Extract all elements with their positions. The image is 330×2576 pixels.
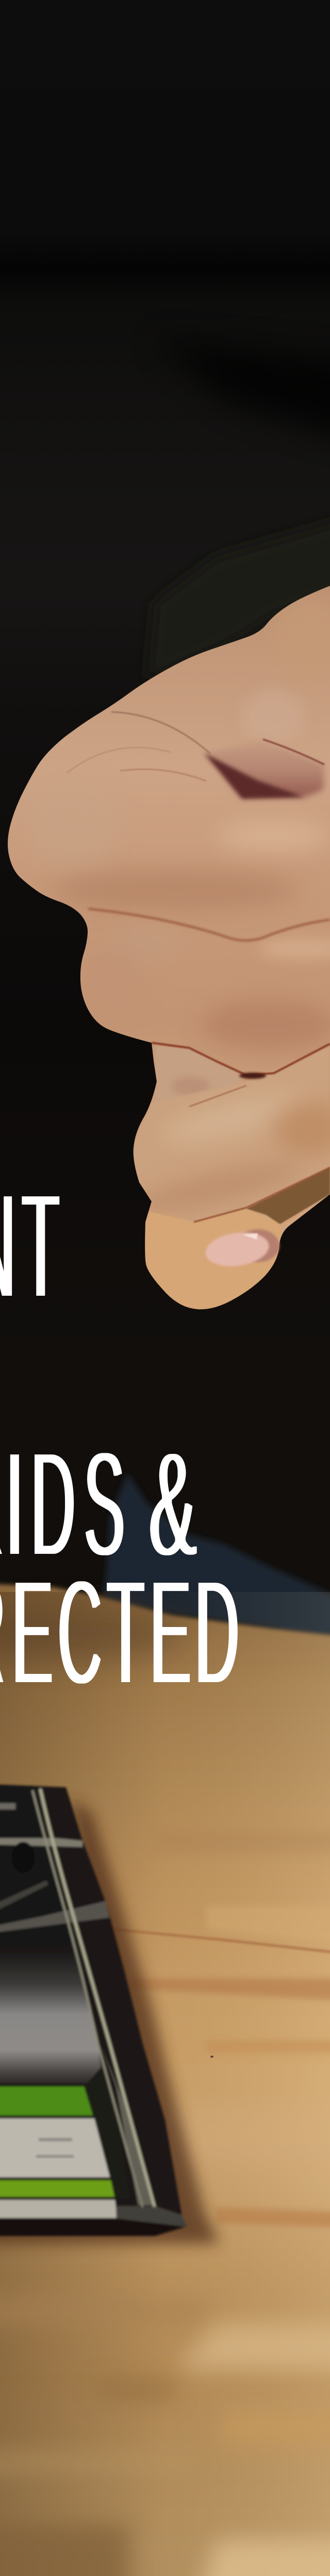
crease: finger and thumb <box>194 1167 330 1222</box>
thumbnail <box>203 1229 279 1270</box>
packet lower edge <box>116 2206 187 2227</box>
thumb <box>145 1211 280 1310</box>
blue denim jeans, out of focus <box>103 1473 330 1643</box>
skin light and shadow <box>249 694 298 735</box>
product packet <box>0 1784 187 2236</box>
dark background: black sleeve and shirt <box>0 0 330 1700</box>
wooden table <box>0 1583 330 2576</box>
headline text, cropped by the left edge <box>0 1162 239 1716</box>
white label panel <box>0 2119 110 2177</box>
hand <box>8 586 330 1319</box>
packet shadow on table <box>0 1798 219 2244</box>
horizontal grey bands <box>0 1838 82 1847</box>
green stripe <box>0 2180 114 2197</box>
crease: first and second finger <box>88 909 330 941</box>
crease: second and third finger <box>152 1043 330 1075</box>
inner dark panel and cream stripes <box>84 2066 130 2199</box>
crease: top of palm <box>204 741 324 798</box>
headline ampersand: & <box>149 1420 196 1587</box>
green label band <box>0 2087 93 2115</box>
wooden stick held between fingers <box>246 1167 330 1224</box>
lower white band <box>0 2200 117 2218</box>
packet body <box>0 1784 187 2233</box>
